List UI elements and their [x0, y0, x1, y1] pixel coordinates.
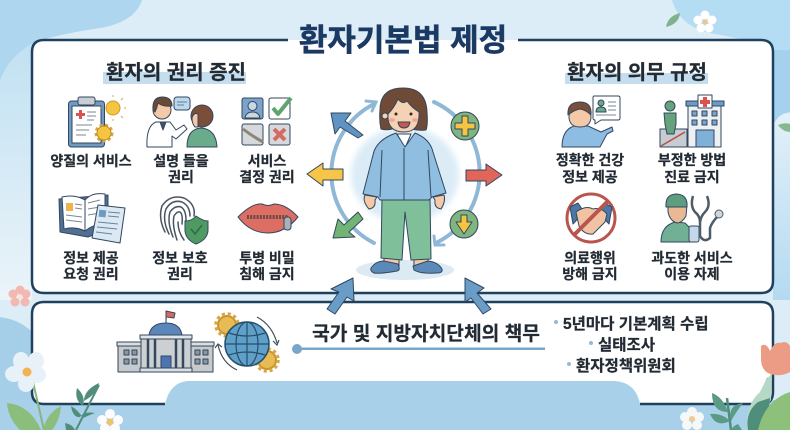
label: 서비스	[248, 153, 286, 169]
label: 정확한 건강	[556, 152, 624, 168]
bullet list: 5년마다 기본계획 수립	[563, 315, 709, 333]
icon: doctor and patient	[147, 97, 217, 147]
heading: patient duties: 환자의 의무 규정	[567, 61, 707, 84]
icon: globe with gears	[215, 314, 279, 371]
figure: arrow yellow	[307, 163, 343, 186]
decoration: bottom right plants and tulip	[680, 342, 790, 430]
decoration: bottom left plants and flowers	[5, 352, 123, 430]
icon: plus circle	[451, 112, 479, 140]
label: 권리	[167, 266, 193, 282]
figure: arrow red	[466, 164, 502, 186]
label: 결정 권리	[239, 169, 295, 185]
icon: down circle	[450, 210, 478, 238]
decoration: pink flower	[8, 286, 30, 306]
icon: person and hospital	[660, 95, 724, 147]
heading: patient rights: 환자의 권리 증진	[106, 61, 246, 84]
bullet list: 실태조사	[598, 336, 655, 354]
label	[562, 250, 618, 282]
icon: government building	[117, 311, 214, 372]
label	[153, 153, 209, 185]
heading: state responsibility: 국가 및 지방자치단체의 책무	[312, 323, 540, 345]
label: 투병 비밀	[239, 250, 295, 266]
responsibility line	[292, 344, 545, 354]
label: 정보 제공	[63, 250, 119, 266]
label: 정보 보호	[152, 250, 208, 266]
blue blob under bottom panel	[165, 381, 640, 430]
icon: man with speech card	[562, 96, 620, 147]
bullet list: 환자정책위원회	[576, 357, 676, 375]
figure: arrow blue	[331, 113, 363, 138]
label: 부정한 방법	[658, 152, 726, 168]
arrow: right up to main panel	[465, 278, 491, 314]
label: 양질의 서비스	[50, 153, 132, 169]
icon: books and documents	[59, 194, 125, 243]
icon: zipped lips	[238, 204, 298, 233]
patient figure	[351, 88, 459, 280]
decoration: top right flower and leaf	[666, 10, 716, 32]
main panel	[32, 40, 773, 293]
icon: clipboard	[68, 95, 126, 147]
arrow: left up to main panel	[327, 278, 354, 314]
label	[651, 250, 733, 282]
title: 환자기본법 제정	[299, 23, 507, 58]
figure: arrow green	[333, 212, 363, 238]
bullet list	[554, 315, 709, 375]
label: 정보 제공	[562, 169, 618, 185]
icon: fingerprint with shield	[161, 197, 208, 244]
label	[63, 250, 119, 282]
label: 방해 금지	[562, 266, 618, 282]
label: 과도한 서비스	[651, 250, 733, 266]
bottom panel	[32, 302, 773, 404]
label	[239, 153, 295, 185]
bottom panel outline	[32, 302, 773, 404]
icon: prohibited handshake	[567, 194, 615, 242]
icon: medical staff with stethoscope	[661, 194, 723, 242]
decoration: right leaf	[778, 123, 790, 132]
label	[556, 152, 624, 185]
figure: ring arcs	[331, 101, 480, 245]
label	[239, 250, 295, 282]
label: 요청 권리	[63, 266, 119, 282]
label	[152, 250, 208, 282]
label: 설명 들을	[153, 153, 209, 169]
label: 진료 금지	[664, 169, 720, 185]
icon: service choice tiles	[242, 98, 291, 145]
label: 이용 자제	[664, 266, 720, 282]
label: 침해 금지	[239, 266, 295, 282]
label: 권리	[168, 169, 194, 185]
label	[658, 152, 726, 185]
label: 의료행위	[564, 250, 616, 266]
